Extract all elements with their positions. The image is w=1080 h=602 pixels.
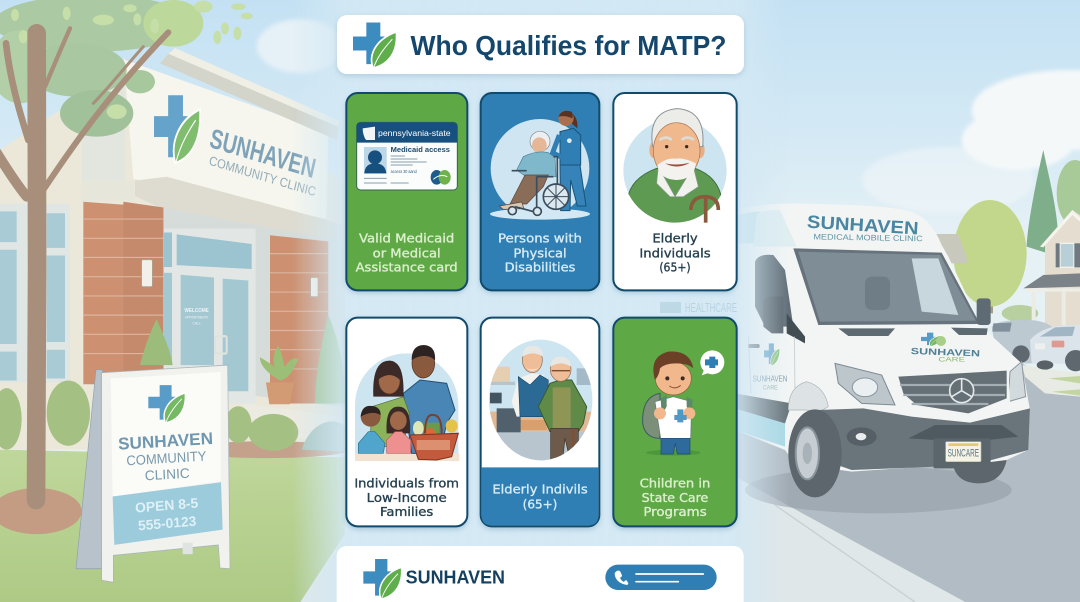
card label: Valid Medicaid: [359, 232, 454, 246]
cards row 1: [346, 93, 737, 293]
card label: [640, 477, 710, 519]
house: [935, 210, 1080, 327]
faint background healthcare lettering: [660, 300, 737, 315]
card label: [492, 482, 588, 511]
A-frame sidewalk sign: SUNHAVEN: [118, 430, 213, 454]
van side logo and text: SUNHAVEN: [753, 374, 787, 384]
speech bubble: [700, 350, 724, 375]
license plate: SUNCARE: [948, 448, 979, 460]
card label: Elderly Indivils: [492, 482, 588, 496]
man in vest: [512, 346, 550, 417]
van hood logo and text: SUNHAVEN: [911, 346, 980, 358]
nurse: [553, 111, 586, 211]
card label: Individuals from: [354, 477, 459, 491]
card label: [356, 232, 458, 275]
van roof text: SUNHAVEN: [806, 212, 919, 238]
grocery basket: [410, 415, 458, 460]
logo: cross and leaf: [353, 22, 397, 68]
A-frame sidewalk sign: CLINIC: [144, 465, 190, 484]
elderly man portrait: [623, 109, 727, 233]
card: physical disabilities: [480, 93, 600, 293]
card label: or Medical: [373, 246, 441, 260]
faint background healthcare lettering: HEALTHCARE: [685, 300, 737, 315]
clinic entrance doors: WELCOME: [185, 308, 209, 314]
footer logo: [363, 559, 402, 599]
wheelchair: [508, 157, 569, 215]
man in green cardigan: [538, 357, 587, 460]
building logo cross and leaf: [154, 95, 200, 163]
card: elderly individuals at checkout: [480, 318, 600, 529]
van shadow: [745, 467, 1012, 513]
Medicaid ID card illustration: pennsylvania-state: [378, 128, 451, 138]
family illustration: [355, 345, 459, 461]
shrubs: [0, 315, 345, 452]
card label: [639, 232, 711, 275]
tree foliage: [0, 0, 253, 137]
van side logo and text: [753, 343, 787, 391]
seated elderly woman: [499, 131, 556, 209]
clinic entrance doors: CALL: [193, 322, 201, 326]
sidewalk corner: [300, 538, 345, 602]
clinic entrance doors: [164, 229, 256, 404]
card label: Low-Income: [367, 491, 447, 505]
potted plant: [260, 346, 298, 404]
card label: Programs: [643, 505, 707, 519]
A-frame sidewalk sign: OPEN 8-5: [135, 495, 199, 516]
distant trees: [953, 150, 1080, 322]
Medicaid ID card illustration: Medicaid access: [391, 145, 450, 154]
heading: Who Qualifies for MATP?: [410, 30, 726, 61]
shade tree: [0, 0, 253, 500]
card label: Assistance card: [356, 261, 458, 275]
cards row 2: [337, 318, 744, 602]
card: low-income families: [346, 318, 468, 529]
A-frame sidewalk sign: COMMUNITY: [126, 448, 207, 469]
card label: (65+): [523, 497, 557, 511]
lawn: [0, 450, 345, 602]
card label: Persons with: [498, 232, 582, 246]
card label: (65+): [659, 261, 691, 275]
phone pill: [605, 565, 717, 590]
father: [403, 345, 455, 453]
clinic entrance doors: APPOINTMENTS: [185, 315, 208, 320]
card: Medicaid card: [346, 93, 468, 293]
mobile clinic van: [735, 203, 1030, 497]
van hood logo and text: CARE: [938, 357, 966, 364]
van roof text: MEDICAL MOBILE CLINIC: [813, 232, 923, 243]
son: [358, 406, 385, 453]
cloud: [862, 70, 1080, 213]
footer bar: [337, 546, 744, 602]
van side logo and text: CARE: [763, 384, 778, 391]
card label: Families: [380, 505, 433, 519]
card label: Individuals: [639, 246, 711, 260]
tree trunk and branches: [0, 28, 168, 500]
sidewalk: [735, 477, 965, 602]
A-frame sidewalk sign: 555-0123: [138, 513, 197, 534]
card label: Physical: [513, 246, 567, 260]
wheelchair illustration: [490, 111, 590, 220]
parked cars: [992, 320, 1080, 371]
road: [735, 363, 1080, 602]
card label: Disabilities: [505, 261, 575, 275]
card: elderly individuals: [613, 93, 737, 293]
center pale blue wash: [292, 0, 789, 602]
daughter: [386, 407, 411, 453]
card label: State Care: [642, 491, 708, 505]
card label: [354, 477, 459, 519]
A-frame sidewalk sign: [76, 365, 230, 582]
van hood logo and text: [911, 333, 980, 364]
card label: Children in: [640, 477, 710, 491]
front wheel: [788, 409, 842, 497]
building sign text: COMMUNITY CLINIC: [208, 153, 318, 199]
checkout counter illustration: [488, 337, 595, 462]
card: children in state care: [613, 318, 737, 529]
card label: [498, 232, 582, 275]
building sign text: SUNHAVEN: [207, 124, 318, 184]
boy with backpack illustration: [643, 350, 724, 456]
mother: [370, 361, 409, 447]
card label: Elderly: [652, 232, 698, 246]
background scene: clinic building and sign: [0, 19, 350, 602]
footer brand name: SUNHAVEN: [406, 566, 505, 587]
title bar: [337, 15, 744, 76]
Medicaid ID card illustration: access 30 aand: [391, 169, 417, 175]
clinic building: [0, 48, 345, 450]
Medicaid ID card illustration: [357, 122, 457, 190]
license plate: [946, 442, 981, 462]
background scene: street, houses and van: [735, 70, 1080, 602]
